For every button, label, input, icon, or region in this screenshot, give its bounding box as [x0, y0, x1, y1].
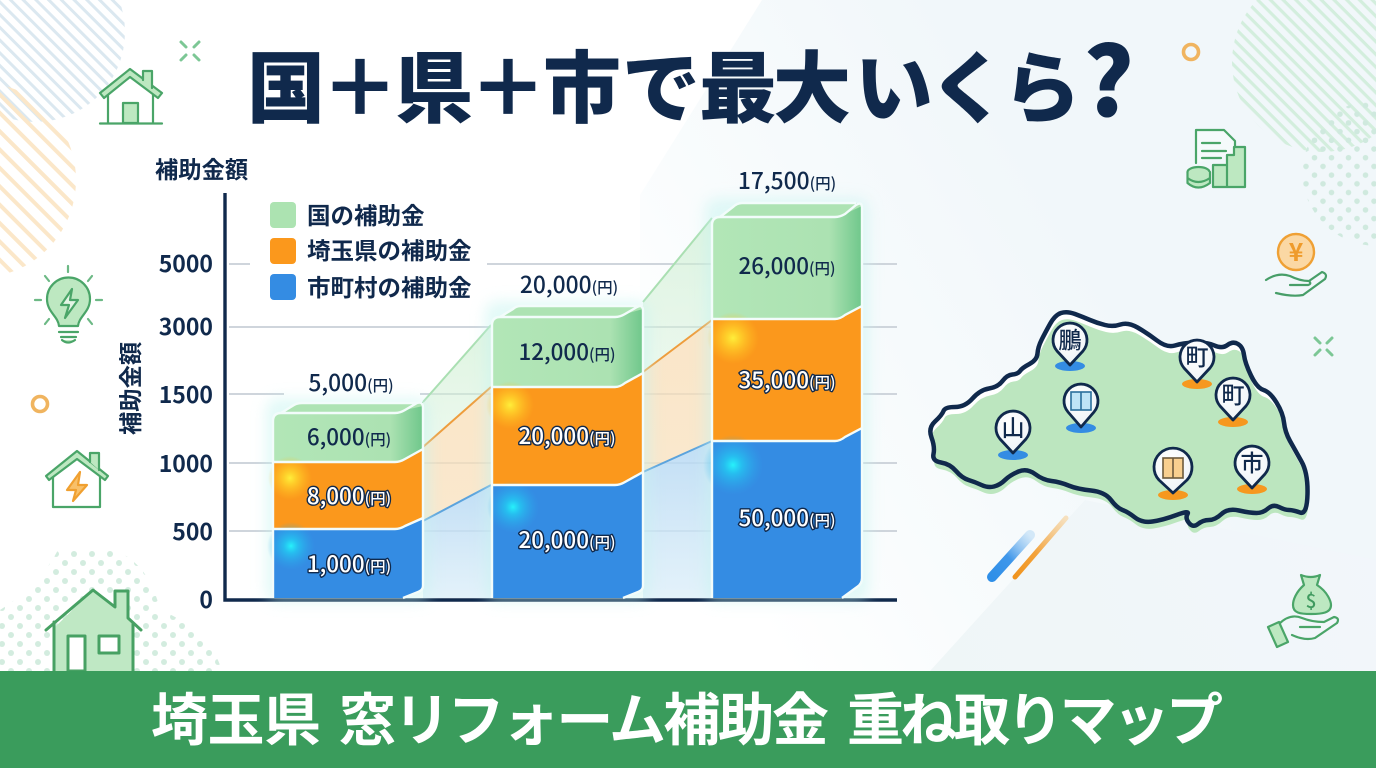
map pin: mountain [996, 409, 1030, 460]
map pin: top left [1053, 321, 1087, 371]
banner text: 埼玉県 [151, 675, 321, 757]
map pin: window blue [1064, 384, 1098, 433]
map pin: town east: 町 [1222, 376, 1244, 410]
y axis ticks: 0 [199, 581, 213, 615]
title: 国＋県＋市で最大いくら? [247, 7, 1130, 144]
map pin: town north [1180, 338, 1214, 389]
connecting translucent bands [423, 218, 712, 598]
icon: house with lightning [46, 451, 108, 507]
y axis ticks [159, 245, 213, 615]
icon: large house bottom left [46, 590, 141, 671]
y axis title: 補助金額 [155, 151, 248, 185]
banner text: 重ね取りマップ [847, 675, 1223, 757]
map pin: window orange [1154, 448, 1192, 500]
bar 3: 17,500(円) [738, 163, 836, 196]
bar 1: 1,000(円) [307, 547, 391, 579]
bar 2: 20,000(円) [520, 267, 618, 300]
y axis ticks: 3000 [159, 308, 213, 342]
legend: 市町村の補助金 [307, 269, 472, 303]
map pin: city [1235, 444, 1269, 494]
y axis ticks: 1000 [159, 445, 213, 479]
grid lines and axes [225, 193, 897, 600]
banner text [151, 675, 1223, 757]
map pin: town east [1216, 376, 1250, 427]
bar 1: 5,000(円) [308, 365, 394, 398]
bar 3: 35,000(円) [738, 363, 836, 395]
icon: sparkle right [1315, 338, 1332, 355]
bar 2: 20,000(円) [518, 419, 616, 451]
bar 2: 12,000(円) [518, 335, 616, 367]
icon: orange ring right [1184, 44, 1198, 60]
map pin: town north: 町 [1186, 338, 1208, 372]
decorative streaks: blue and orange [992, 518, 1066, 577]
legend: 埼玉県の補助金 [307, 232, 472, 266]
chart: stacked subsidy bars [112, 151, 897, 615]
legend: 国の補助金 [307, 197, 425, 231]
icon: yen coin on hand [1266, 233, 1326, 296]
icon: orange ring left [32, 396, 48, 412]
bar 2 [485, 267, 650, 602]
legend [270, 197, 472, 303]
bar 1: 6,000(円) [307, 420, 391, 452]
y axis ticks: 1500 [159, 376, 213, 410]
bar 3: 50,000(円) [738, 501, 836, 533]
y axis ticks: 500 [172, 513, 213, 547]
map pin: mountain: 山 [1002, 409, 1024, 443]
bar 3: 26,000(円) [738, 249, 836, 281]
bottom banner [0, 671, 1376, 768]
bar 3 [703, 163, 869, 602]
icon: house top left [100, 69, 162, 124]
icon: sparkle top [181, 42, 199, 60]
banner text: 窓リフォーム補助金 [339, 675, 829, 757]
bar 2: 20,000(円) [518, 523, 616, 555]
y axis ticks: 5000 [159, 245, 213, 279]
icon: money bag on hand: $ [1306, 587, 1316, 614]
map of Saitama [930, 312, 1309, 533]
map pin: top left: 鵬 [1058, 321, 1082, 355]
map pin: city: 市 [1240, 444, 1264, 478]
bar 1 [266, 365, 430, 602]
y axis vertical label: 補助金額 [112, 342, 146, 435]
icon: document coins and bars [1188, 130, 1245, 188]
icon: money bag on hand [1268, 575, 1338, 647]
bar 1: 8,000(円) [307, 479, 391, 511]
icon: yen coin on hand: ¥ [1289, 233, 1304, 269]
icon: light bulb [35, 266, 102, 342]
